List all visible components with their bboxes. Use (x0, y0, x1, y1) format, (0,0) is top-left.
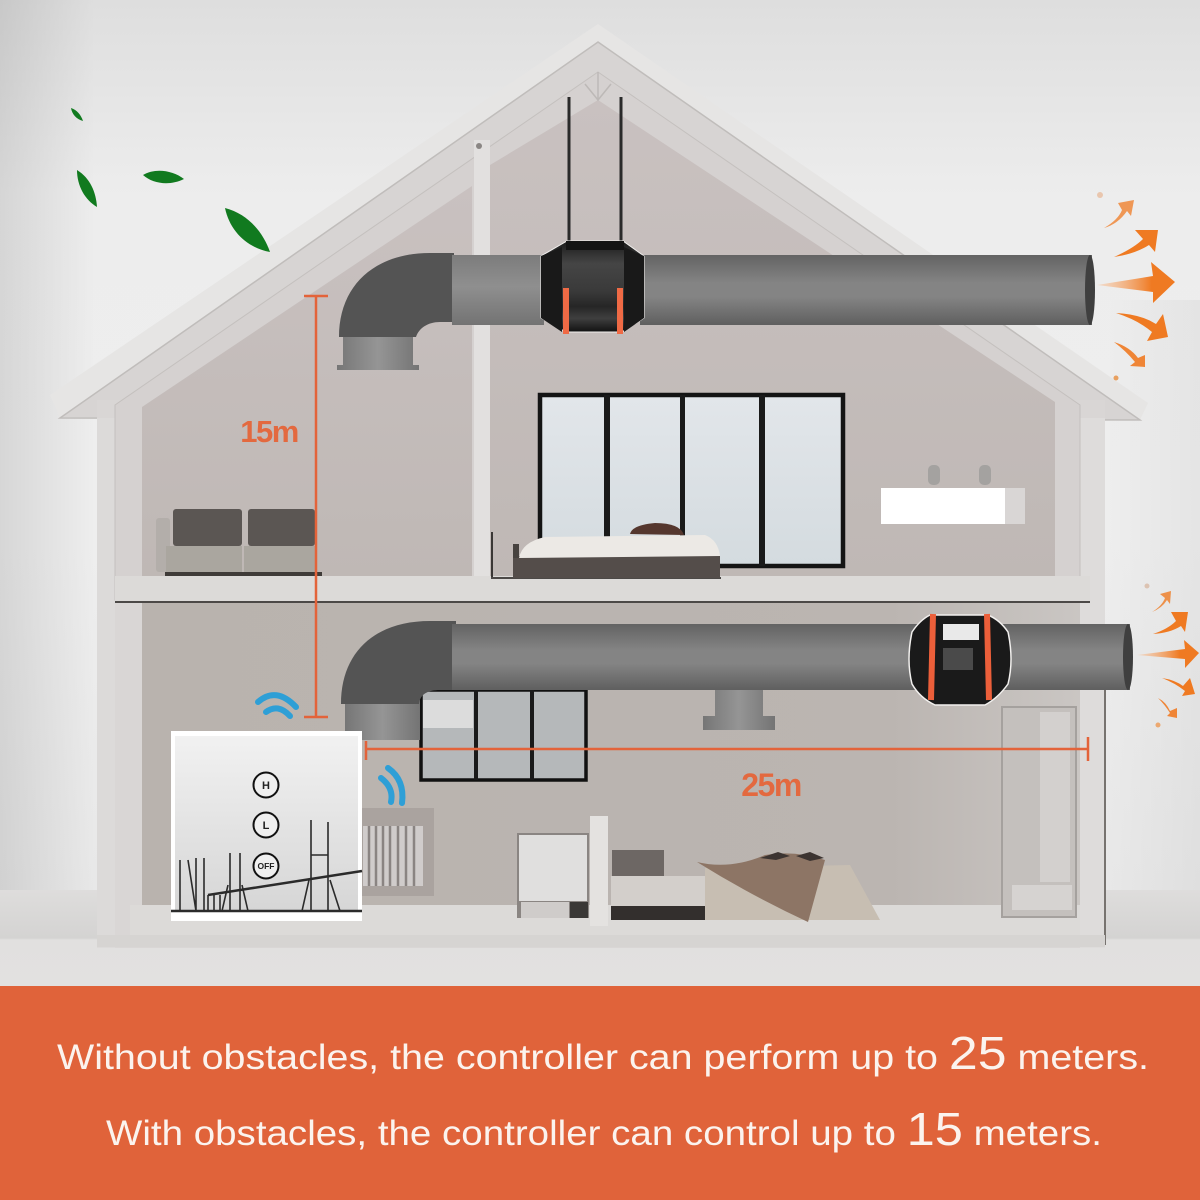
vent (703, 688, 775, 730)
upper right room (490, 100, 1055, 576)
caption line 2: With obstacles, the controller can control up to 15 meters. (106, 1103, 1102, 1155)
25m dimension line (366, 737, 1088, 761)
upper left room (142, 186, 472, 576)
lower collar (345, 700, 420, 740)
25m label: 25m (741, 767, 801, 803)
H button: H (262, 780, 270, 792)
upper collar (337, 337, 419, 370)
L button (254, 812, 278, 838)
ground (0, 890, 1200, 986)
lower duct (341, 614, 1133, 740)
gable inner face (115, 72, 1080, 600)
house (50, 24, 1148, 948)
roof (50, 24, 1148, 420)
OFF button (254, 854, 278, 878)
lower pipe (452, 624, 1130, 690)
L button: L (263, 820, 270, 832)
lower elbow (341, 621, 456, 704)
leaves (71, 108, 270, 252)
radiator (362, 808, 434, 896)
cabinet (517, 816, 608, 926)
orange banner (0, 986, 1200, 1200)
wifi signal top (258, 695, 296, 716)
upper window (540, 395, 843, 566)
15m label: 15m (240, 414, 298, 449)
background wall (0, 0, 1200, 890)
lower room (142, 603, 1080, 905)
upper fan (541, 97, 644, 334)
bed lower (611, 850, 880, 922)
bridge line art (171, 820, 362, 911)
lower fan (909, 614, 1011, 705)
H button (254, 772, 278, 798)
exhaust arrows top (1097, 192, 1175, 380)
bathroom sink (881, 465, 1025, 524)
bed upper (513, 523, 720, 578)
OFF button: OFF (258, 861, 274, 871)
upper elbow (339, 253, 454, 337)
15m dimension line (304, 296, 328, 717)
upper pipe right (640, 255, 1092, 325)
caption line 1: Without obstacles, the controller can perform up to 25 meters. (57, 1027, 1149, 1079)
lower floor (130, 905, 1080, 935)
upper duct (337, 97, 1095, 370)
upper pipe left (452, 255, 544, 325)
controller (171, 731, 362, 921)
partition wall (474, 140, 490, 580)
exhaust arrows bottom (1137, 584, 1199, 728)
wifi signal right (381, 768, 402, 803)
lower window (421, 690, 586, 780)
ridge seam (585, 72, 611, 100)
wardrobe (1002, 707, 1076, 917)
sofa (156, 509, 322, 576)
upper floor slab (115, 576, 1090, 602)
house walls (97, 400, 1105, 948)
